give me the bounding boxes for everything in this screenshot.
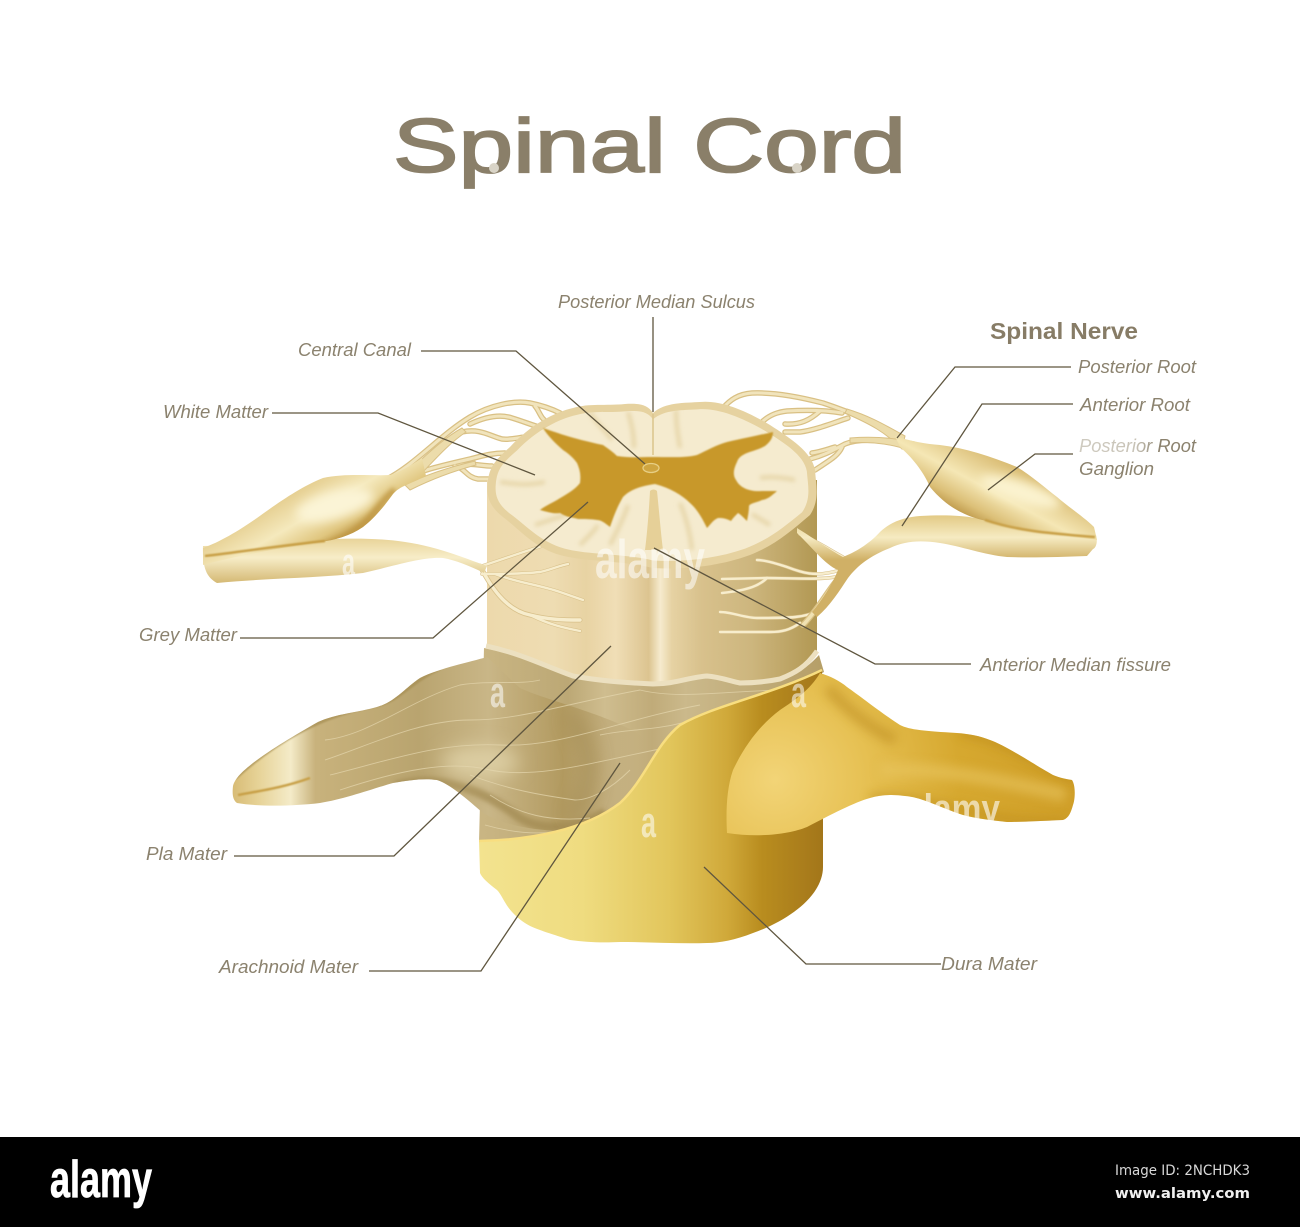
spinal cord illustration	[203, 393, 1097, 943]
label: Posterior Root Ganglion: Posterior Root	[1079, 435, 1197, 456]
stock watermarks	[342, 528, 1001, 847]
label: Posterior Root	[897, 356, 1197, 438]
label: Pla Mater	[146, 646, 611, 864]
dura mater nerve	[727, 673, 1075, 835]
white matter	[496, 409, 808, 561]
nerve fibres	[325, 680, 790, 833]
label: Anterior Median fissure	[654, 548, 1171, 675]
left posterior root ganglion	[203, 458, 426, 565]
label: Dura Mater	[704, 867, 1038, 974]
label: Posterior Root Ganglion	[988, 435, 1197, 490]
spinal nerve roots: posterior, behind cord	[385, 393, 915, 490]
label: White Matter: White Matter	[163, 401, 269, 422]
label: White Matter	[163, 401, 535, 475]
left nerve ridge	[205, 541, 325, 556]
image id: Image ID: 2NCHDK3	[1115, 1163, 1250, 1179]
label: Posterior Root: Posterior Root	[1078, 356, 1197, 377]
grey matter butterfly	[540, 428, 777, 528]
label: Central Canal	[298, 339, 645, 464]
outer ring	[487, 402, 817, 568]
dura mater body	[479, 670, 823, 943]
cord cross-section	[487, 402, 817, 568]
stock watermarks: a	[342, 542, 356, 584]
dura top edge	[479, 670, 822, 841]
pale anterior roots on column	[480, 534, 845, 632]
label: Pla Mater: Pla Mater	[146, 843, 228, 864]
footer bar	[0, 1137, 1300, 1227]
stock watermarks: alamy	[595, 528, 705, 590]
heading: Spinal Nerve: Spinal Nerve	[990, 318, 1138, 344]
stock watermarks: a	[791, 668, 806, 717]
central canal	[643, 464, 659, 472]
right nerve ridge	[985, 520, 1095, 537]
label: Grey Matter	[139, 502, 588, 645]
nerve shading clipped to shape	[235, 668, 605, 827]
stock watermarks: alamy	[905, 787, 1001, 831]
stock watermarks: a	[490, 668, 505, 717]
anterior median fissure	[645, 490, 663, 550]
footer logo: alamy	[50, 1151, 152, 1209]
label: Anterior Root	[902, 394, 1191, 526]
label: Anterior Median fissure: Anterior Median fissure	[979, 654, 1171, 675]
dura nerve shading	[828, 688, 1075, 822]
label: Posterior Root Ganglion: Ganglion	[1079, 458, 1154, 479]
pia mater region	[479, 648, 824, 842]
website: www.alamy.com	[1115, 1186, 1250, 1202]
pia mater nerve	[233, 657, 790, 833]
right anterior root	[797, 515, 1097, 617]
label: Anterior Root: Anterior Root	[1079, 394, 1191, 415]
label: Central Canal: Central Canal	[298, 339, 412, 360]
posterior median sulcus	[652, 414, 654, 455]
left anterior root	[203, 539, 487, 583]
label: Grey Matter: Grey Matter	[139, 624, 238, 645]
spinal cord column	[487, 480, 817, 683]
root necks	[400, 409, 915, 490]
pale ring between cord and pia	[486, 646, 817, 684]
label: Posterior Median Sulcus: Posterior Median Sulcus	[558, 291, 755, 312]
right posterior root ganglion	[895, 436, 1097, 540]
white matter streaks	[500, 410, 795, 550]
stock watermarks: a	[641, 798, 656, 847]
label: Arachnoid Mater	[218, 763, 620, 977]
title: Spinal Cord	[393, 104, 906, 189]
label: Dura Mater: Dura Mater	[941, 953, 1038, 974]
label: Arachnoid Mater: Arachnoid Mater	[218, 956, 359, 977]
